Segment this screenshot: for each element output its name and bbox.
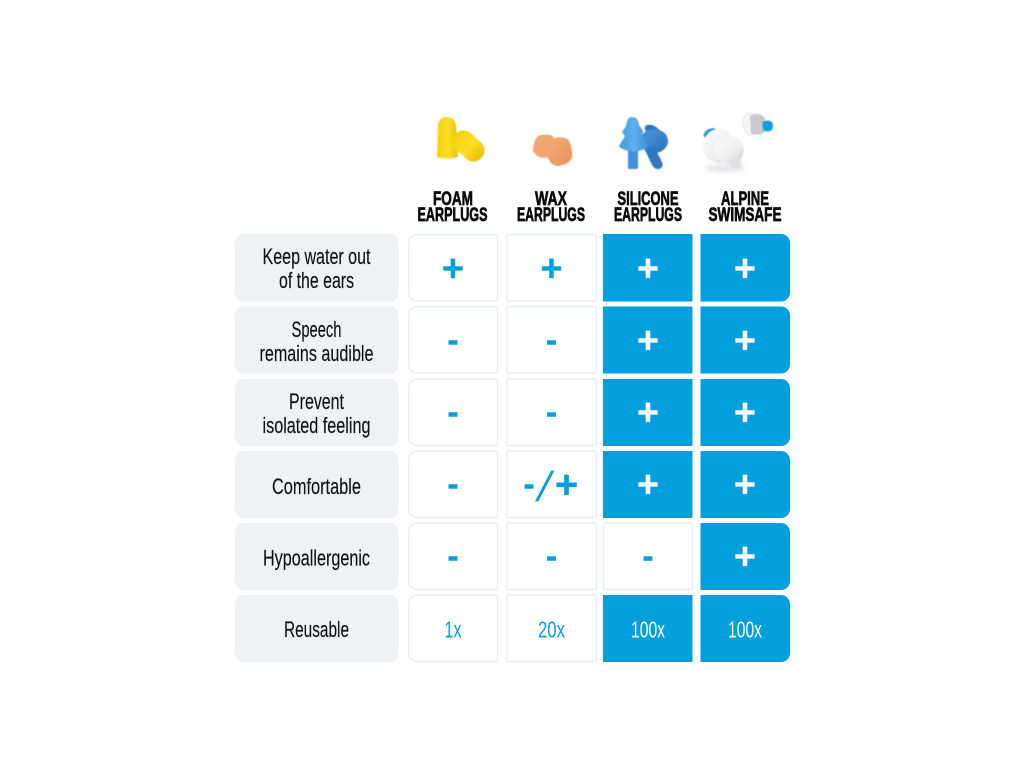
row: comfortable: Comfortable — [272, 474, 361, 499]
heading: wax earplugs: EARPLUGS — [517, 205, 585, 226]
label cell — [235, 451, 399, 518]
icon: wax earplugs — [533, 134, 572, 166]
heading: foam earplugs: EARPLUGS — [418, 205, 488, 226]
icon: silicone earplugs — [619, 117, 668, 169]
heading: alpine swimsafe: ALPINE — [721, 189, 769, 210]
row: reusable: 100x — [631, 616, 665, 642]
icon: alpine swimsafe earplugs — [702, 112, 773, 172]
front plug — [619, 117, 648, 169]
row: reusable: Reusable — [284, 617, 349, 642]
row: hypoallergenic: - — [448, 537, 458, 574]
row: prevent isolated feeling: + — [637, 392, 659, 434]
row: keep water out: + — [734, 248, 756, 290]
row: prevent isolated feeling: Prevent — [289, 389, 344, 414]
row: keep water out: + — [442, 248, 464, 290]
row: prevent isolated feeling: isolated feeling — [262, 413, 370, 438]
row: keep water out — [235, 234, 790, 302]
row: keep water out: + — [637, 248, 659, 290]
heading: alpine swimsafe — [708, 189, 782, 226]
row: speech remains audible: - — [448, 321, 458, 358]
row: reusable — [235, 595, 790, 662]
row: reusable: 20x — [538, 616, 565, 642]
heading: silicone earplugs: SILICONE — [618, 189, 678, 210]
row: speech remains audible: + — [734, 320, 756, 362]
row: reusable: 1x — [444, 616, 462, 642]
main plug — [702, 126, 744, 168]
label cell — [235, 234, 399, 302]
row: comfortable: + — [637, 464, 659, 506]
heading: foam earplugs: FOAM — [433, 189, 473, 210]
heading: wax earplugs — [517, 189, 585, 226]
heading: alpine swimsafe: SWIMSAFE — [708, 205, 782, 226]
row: comfortable: - — [524, 465, 534, 502]
label cell — [235, 595, 399, 662]
small plug — [741, 112, 773, 136]
row: speech remains audible — [235, 306, 790, 374]
heading: silicone earplugs — [614, 189, 682, 226]
row: speech remains audible: Speech — [292, 317, 342, 342]
row: prevent isolated feeling: - — [448, 393, 458, 430]
row: hypoallergenic: + — [734, 536, 756, 578]
row: prevent isolated feeling: + — [734, 392, 756, 434]
row: prevent isolated feeling: - — [546, 393, 557, 430]
label cell — [235, 379, 399, 446]
row: speech remains audible: - — [546, 321, 557, 358]
row: hypoallergenic: - — [546, 537, 557, 574]
row: keep water out: of the ears — [279, 268, 354, 293]
row: comfortable — [235, 451, 790, 518]
heading: silicone earplugs: EARPLUGS — [614, 205, 682, 226]
row: comfortable: / — [533, 464, 556, 511]
heading: foam earplugs — [418, 189, 488, 226]
row: reusable: 100x — [728, 616, 762, 642]
row: speech remains audible: remains audible — [260, 341, 374, 366]
row: keep water out: + — [540, 248, 563, 290]
row: comfortable: + — [555, 463, 578, 507]
row: hypoallergenic: Hypoallergenic — [263, 546, 370, 570]
label cell — [235, 523, 399, 590]
row: comfortable: - — [448, 465, 458, 502]
back plug — [640, 122, 668, 169]
row: hypoallergenic: - — [642, 537, 654, 574]
heading: wax earplugs: WAX — [535, 189, 567, 210]
row: hypoallergenic — [235, 523, 790, 590]
label cell — [235, 306, 399, 374]
row: prevent isolated feeling — [235, 379, 790, 446]
icon: foam earplugs — [437, 117, 489, 166]
row: keep water out: Keep water out — [262, 244, 370, 269]
row: speech remains audible: + — [637, 320, 659, 362]
row: comfortable: + — [734, 464, 756, 506]
